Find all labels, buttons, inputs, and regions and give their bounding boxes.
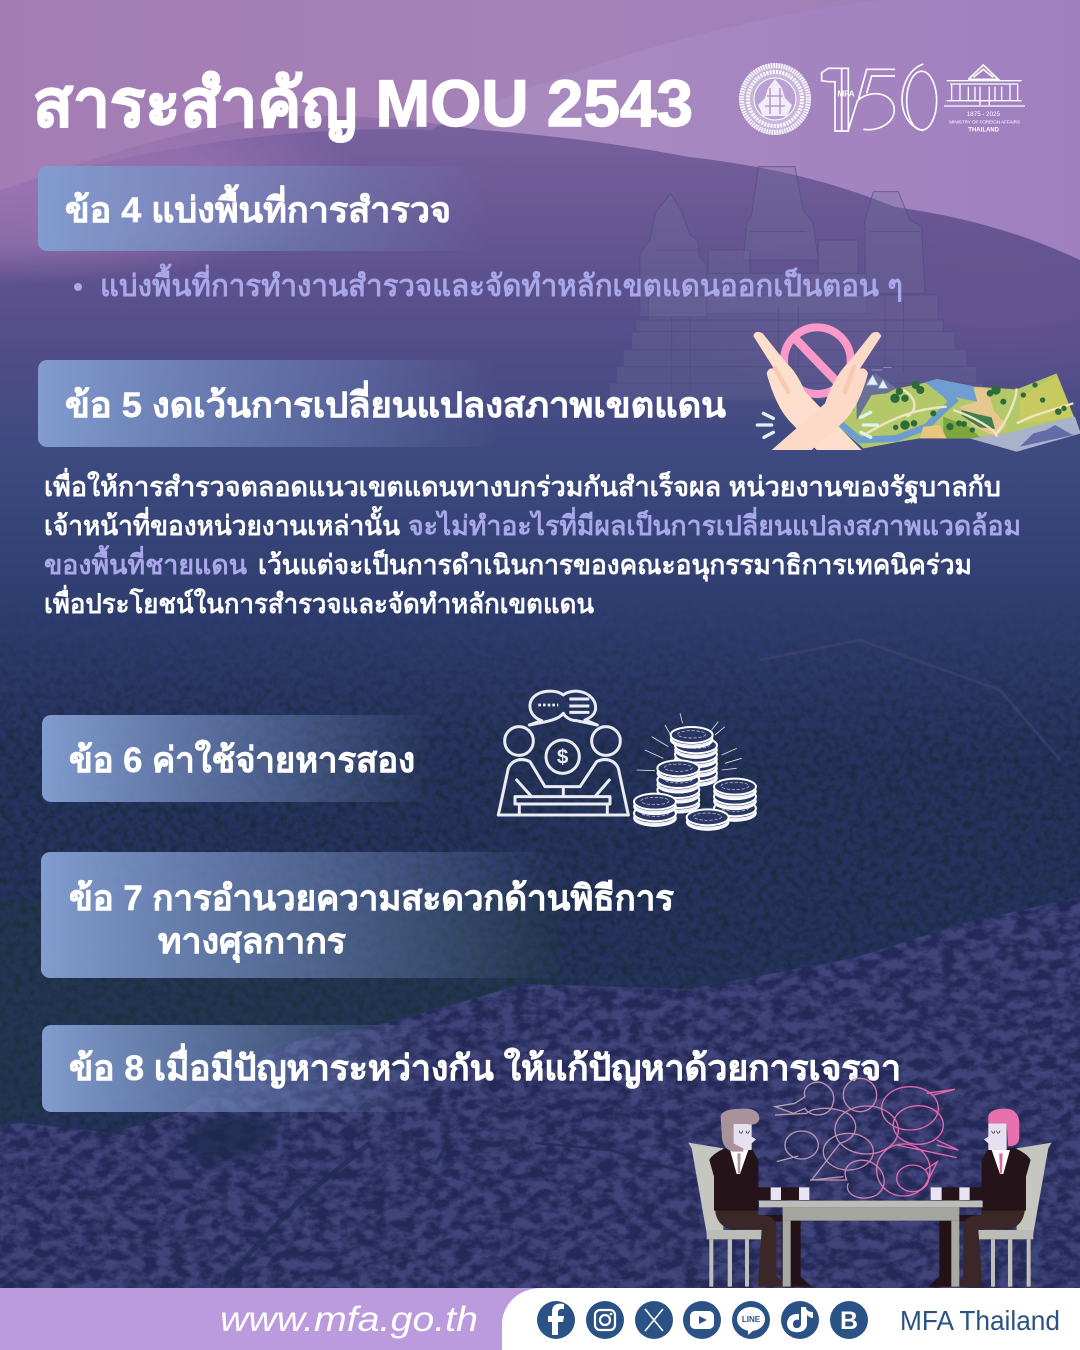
logo: MFA 150 years: MFA: [837, 89, 855, 99]
speech bubbles: [775, 1078, 958, 1198]
panel: article 8 heading: [42, 1025, 901, 1112]
logo: MFA seal: [739, 63, 811, 135]
panel: article 7 heading: ทางศุลกากร: [158, 922, 346, 963]
logo: MFA 150 years: THAILAND: [968, 127, 1000, 133]
thighs and near legs: [715, 1207, 788, 1287]
text: article 5 body paragraph: เพื่อให้การสำรวจตลอดแนวเขตแดนทางบกร่วมกันสำเร็จผล หน่วยงานของรัฐบาลกับ: [44, 467, 1001, 505]
chairs: [688, 1143, 723, 1233]
logo: MFA 150 years: MINISTRY OF FOREIGN AFFAIRS: [949, 119, 1020, 124]
far legs: [760, 1215, 812, 1287]
heads: [733, 1123, 756, 1150]
footer account name: MFA Thailand: [900, 1305, 1060, 1336]
text: article 5 body paragraph: จะไม่ทำอะไรที่มีผลเป็นการเปลี่ยนแปลงสภาพแวดล้อม: [408, 506, 1021, 541]
text: article 5 body paragraph: ของพื้นที่ชายแดน: [44, 544, 248, 580]
footer: [0, 1288, 1080, 1350]
panel: article 6 heading: [42, 715, 437, 802]
jackets: [709, 1148, 771, 1211]
shirts and ties: [730, 1150, 748, 1174]
cups: [771, 1187, 970, 1200]
panel: article 7 heading: ข้อ 7 การอำนวยความสะดวกด้านพิธีการ: [69, 879, 674, 918]
panel: article 5 heading: ข้อ 5 งดเว้นการเปลี่ยนแปลงสภาพเขตแดน: [65, 380, 726, 425]
temple silhouette: [610, 167, 983, 400]
icon: crossed hands over a map: [753, 327, 1080, 452]
table: [759, 1201, 983, 1207]
social icons: B: [840, 1307, 858, 1335]
panel: article 4 heading: ข้อ 4 แบ่งพื้นที่การสำรวจ: [65, 184, 451, 230]
panel: article 4 heading: [38, 166, 488, 251]
title: สาระสำคัญ MOU 2543: [33, 66, 693, 142]
social icons: LINE: [742, 1315, 761, 1324]
text: article 5 body paragraph: เจ้าหน้าที่ของหน่วยงานเหล่านั้น: [44, 505, 401, 541]
logo: MFA 150 years: 1875 - 2025: [967, 111, 1000, 118]
text: article 4 bullet: แบ่งพื้นที่การทำงานสำรวจและจัดทำหลักเขตแดนออกเป็นตอน ๆ: [100, 263, 903, 303]
social icons: [537, 1301, 868, 1339]
panel: article 7 heading: [41, 852, 674, 978]
panel: article 8 heading: ข้อ 8 เมื่อมีปัญหาระหว่างกัน ให้แก้ปัญหาด้วยการเจรจา: [69, 1043, 901, 1089]
illustration: two diplomats negotiating at a table: [688, 1078, 1052, 1287]
logo: MFA 150 years: [822, 64, 1025, 133]
panel: article 5 heading: [38, 360, 726, 447]
panel: article 6 heading: ข้อ 6 ค่าใช้จ่ายหารสอง: [69, 739, 415, 780]
icon: two people sharing costs, with coins: $: [557, 745, 569, 768]
text: article 5 body paragraph: เว้นแต่จะเป็นการดำเนินการของคณะอนุกรรมาธิการเทคนิคร่วม: [258, 547, 972, 582]
text: article 5 body paragraph: เพื่อประโยชน์ในการสำรวจและจัดทำหลักเขตแดน: [44, 584, 595, 619]
text: article 5 body paragraph: [44, 467, 1021, 619]
footer website: www.mfa.go.th: [220, 1300, 478, 1339]
icon: two people sharing costs, with coins: [498, 691, 756, 830]
